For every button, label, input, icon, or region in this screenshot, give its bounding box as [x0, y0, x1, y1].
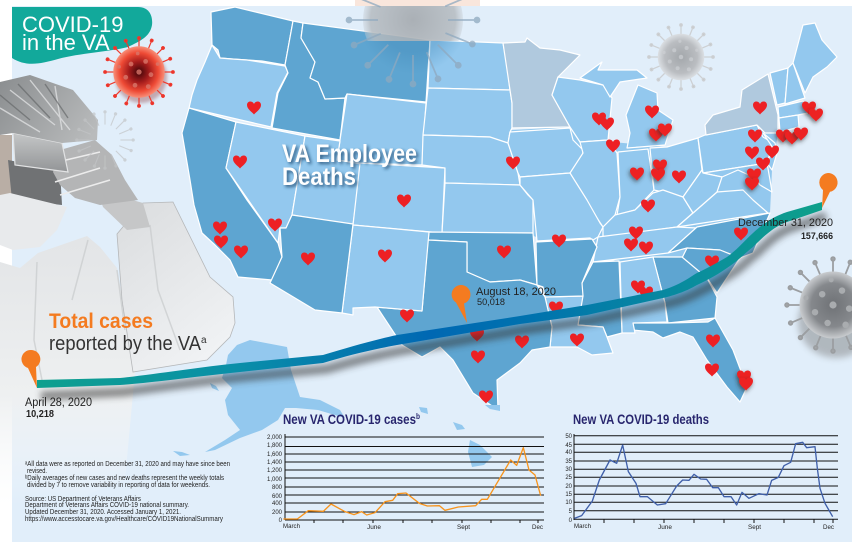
x-axis labels: deaths: Sept — [748, 524, 761, 531]
x-axis labels: deaths: June — [658, 524, 672, 531]
y-axis labels: deaths: 0 — [569, 518, 573, 524]
heading: total cases: reported by the VA — [49, 333, 202, 355]
gown sleeve — [117, 202, 235, 372]
photo: health care worker with hand on forehead — [0, 75, 235, 505]
label: August 18 cases — [476, 286, 556, 308]
footnotes and source: divided by 7 to remove variability in reporting of data for weekends. — [27, 482, 210, 489]
gown folds — [34, 225, 180, 380]
x-axis labels: deaths — [574, 523, 835, 531]
y-axis labels: deaths: 40 — [565, 450, 573, 456]
label: August 18 cases: 50,018 — [477, 297, 505, 308]
footnotes and source: https://www.accesstocare.va.gov/Healthcare/COVID19NationalSummary — [25, 516, 223, 523]
header badge: COVID-19 — [22, 12, 123, 37]
y-axis labels: cases: 1,200 — [267, 468, 283, 474]
pin: December 31 — [819, 173, 838, 208]
label: April 28 cases: April 28, 2020 — [25, 397, 92, 409]
icon: red virus — [104, 37, 174, 107]
y-axis labels: deaths: 10 — [565, 500, 573, 506]
face — [8, 160, 62, 205]
x-axis labels: deaths: March — [574, 523, 591, 530]
y-axis labels: cases: 800 — [272, 485, 283, 491]
x-axis labels: cases — [283, 523, 544, 531]
line series: cases — [283, 448, 541, 519]
x-axis labels: cases: Dec — [532, 524, 544, 531]
y-axis labels: deaths: 25 — [565, 475, 573, 481]
footnotes and source: ᵇDaily averages of new cases and new deaths represent the weekly totals — [25, 475, 224, 482]
chart: new VA COVID-19 deaths — [565, 411, 838, 531]
chart title: cases: New VA COVID-19 cases — [283, 411, 445, 427]
ribbon shadow — [41, 216, 826, 396]
x-axis labels: cases: June — [367, 524, 381, 531]
icon: large grey virus at right — [785, 257, 858, 358]
y-axis labels: deaths: 20 — [565, 484, 573, 490]
goggles — [13, 133, 68, 172]
y-axis labels: deaths: 50 — [565, 434, 573, 440]
hand — [53, 140, 138, 205]
y-axis labels: cases — [267, 435, 283, 524]
x-axis labels: cases: March — [283, 523, 300, 530]
map heading — [282, 140, 419, 193]
heading: total cases: Total cases — [49, 310, 153, 333]
heading: total cases: a — [201, 335, 207, 346]
y-axis labels: deaths — [565, 434, 573, 524]
line series: deaths — [574, 442, 833, 518]
map heading: VA Employee — [282, 140, 417, 168]
y-axis labels: deaths: 45 — [565, 443, 573, 449]
header badge — [12, 7, 152, 64]
x-axis labels: cases: Sept — [457, 524, 470, 531]
footnotes and source: Department of Veterans Affairs COVID-19 national summary. — [25, 502, 189, 509]
icon: grey virus upper right — [648, 24, 714, 90]
pin: April 28 — [21, 350, 40, 388]
map heading: Deaths — [284, 165, 358, 193]
footnotes and source: ᵃAll data were as reported on December 31, 2020 and may have since been — [25, 461, 230, 468]
icon: faint virus at top of map — [346, 0, 480, 86]
y-axis labels: deaths: 15 — [565, 492, 573, 498]
pin: August 18 — [452, 285, 470, 323]
hearts: employee deaths by location — [213, 102, 823, 404]
gown body — [0, 236, 135, 505]
footnotes and source: revised. — [27, 468, 47, 475]
label: August 18 cases: August 18, 2020 — [476, 286, 556, 298]
footnotes and source — [25, 461, 230, 523]
heading: total cases — [49, 310, 207, 355]
y-axis labels: cases: 1,400 — [267, 460, 283, 466]
footnotes and source: Updated December 31, 2020. Accessed January 1, 2021. — [25, 509, 181, 516]
surgical mask — [0, 193, 67, 250]
label: April 28 cases — [25, 397, 92, 420]
map of US states — [182, 7, 837, 410]
y-axis labels: cases: 200 — [272, 510, 283, 516]
label: April 28 cases: 10,218 — [26, 409, 54, 420]
cap — [0, 75, 98, 143]
y-axis labels: cases: 2,000 — [267, 435, 283, 441]
y-axis labels: cases: 400 — [272, 501, 283, 507]
x-axis labels: deaths: Dec — [823, 524, 835, 531]
y-axis labels: cases: 1,000 — [267, 477, 283, 483]
footnotes and source: Source: US Department of Veterans Affairs — [25, 496, 141, 503]
ribbon: total cases timeline — [37, 202, 822, 388]
y-axis labels: cases: 1,800 — [267, 443, 283, 449]
header badge: in the VA — [22, 30, 110, 55]
map heading: Deaths — [282, 163, 356, 191]
y-axis labels: cases: 1,600 — [267, 452, 283, 458]
forearm — [97, 190, 150, 230]
icon: faint virus behind photo — [76, 111, 134, 169]
label: December 31 cases: 157,666 — [801, 231, 833, 242]
y-axis labels: cases: 600 — [272, 494, 283, 500]
y-axis labels: deaths: 35 — [565, 459, 573, 465]
label: December 31 cases — [738, 217, 833, 242]
chart title: cases: b — [416, 412, 420, 421]
chart: new VA COVID-19 cases — [267, 411, 544, 531]
y-axis labels: deaths: 5 — [569, 509, 573, 515]
map heading: VA Employee — [284, 142, 419, 170]
map inset: Hawaii — [419, 405, 500, 467]
chart title: deaths: New VA COVID-19 deaths — [573, 411, 709, 427]
map inset: Alaska — [173, 340, 345, 456]
y-axis labels: cases: 0 — [279, 518, 283, 524]
y-axis labels: deaths: 30 — [565, 467, 573, 473]
label: December 31 cases: December 31, 2020 — [738, 217, 833, 229]
